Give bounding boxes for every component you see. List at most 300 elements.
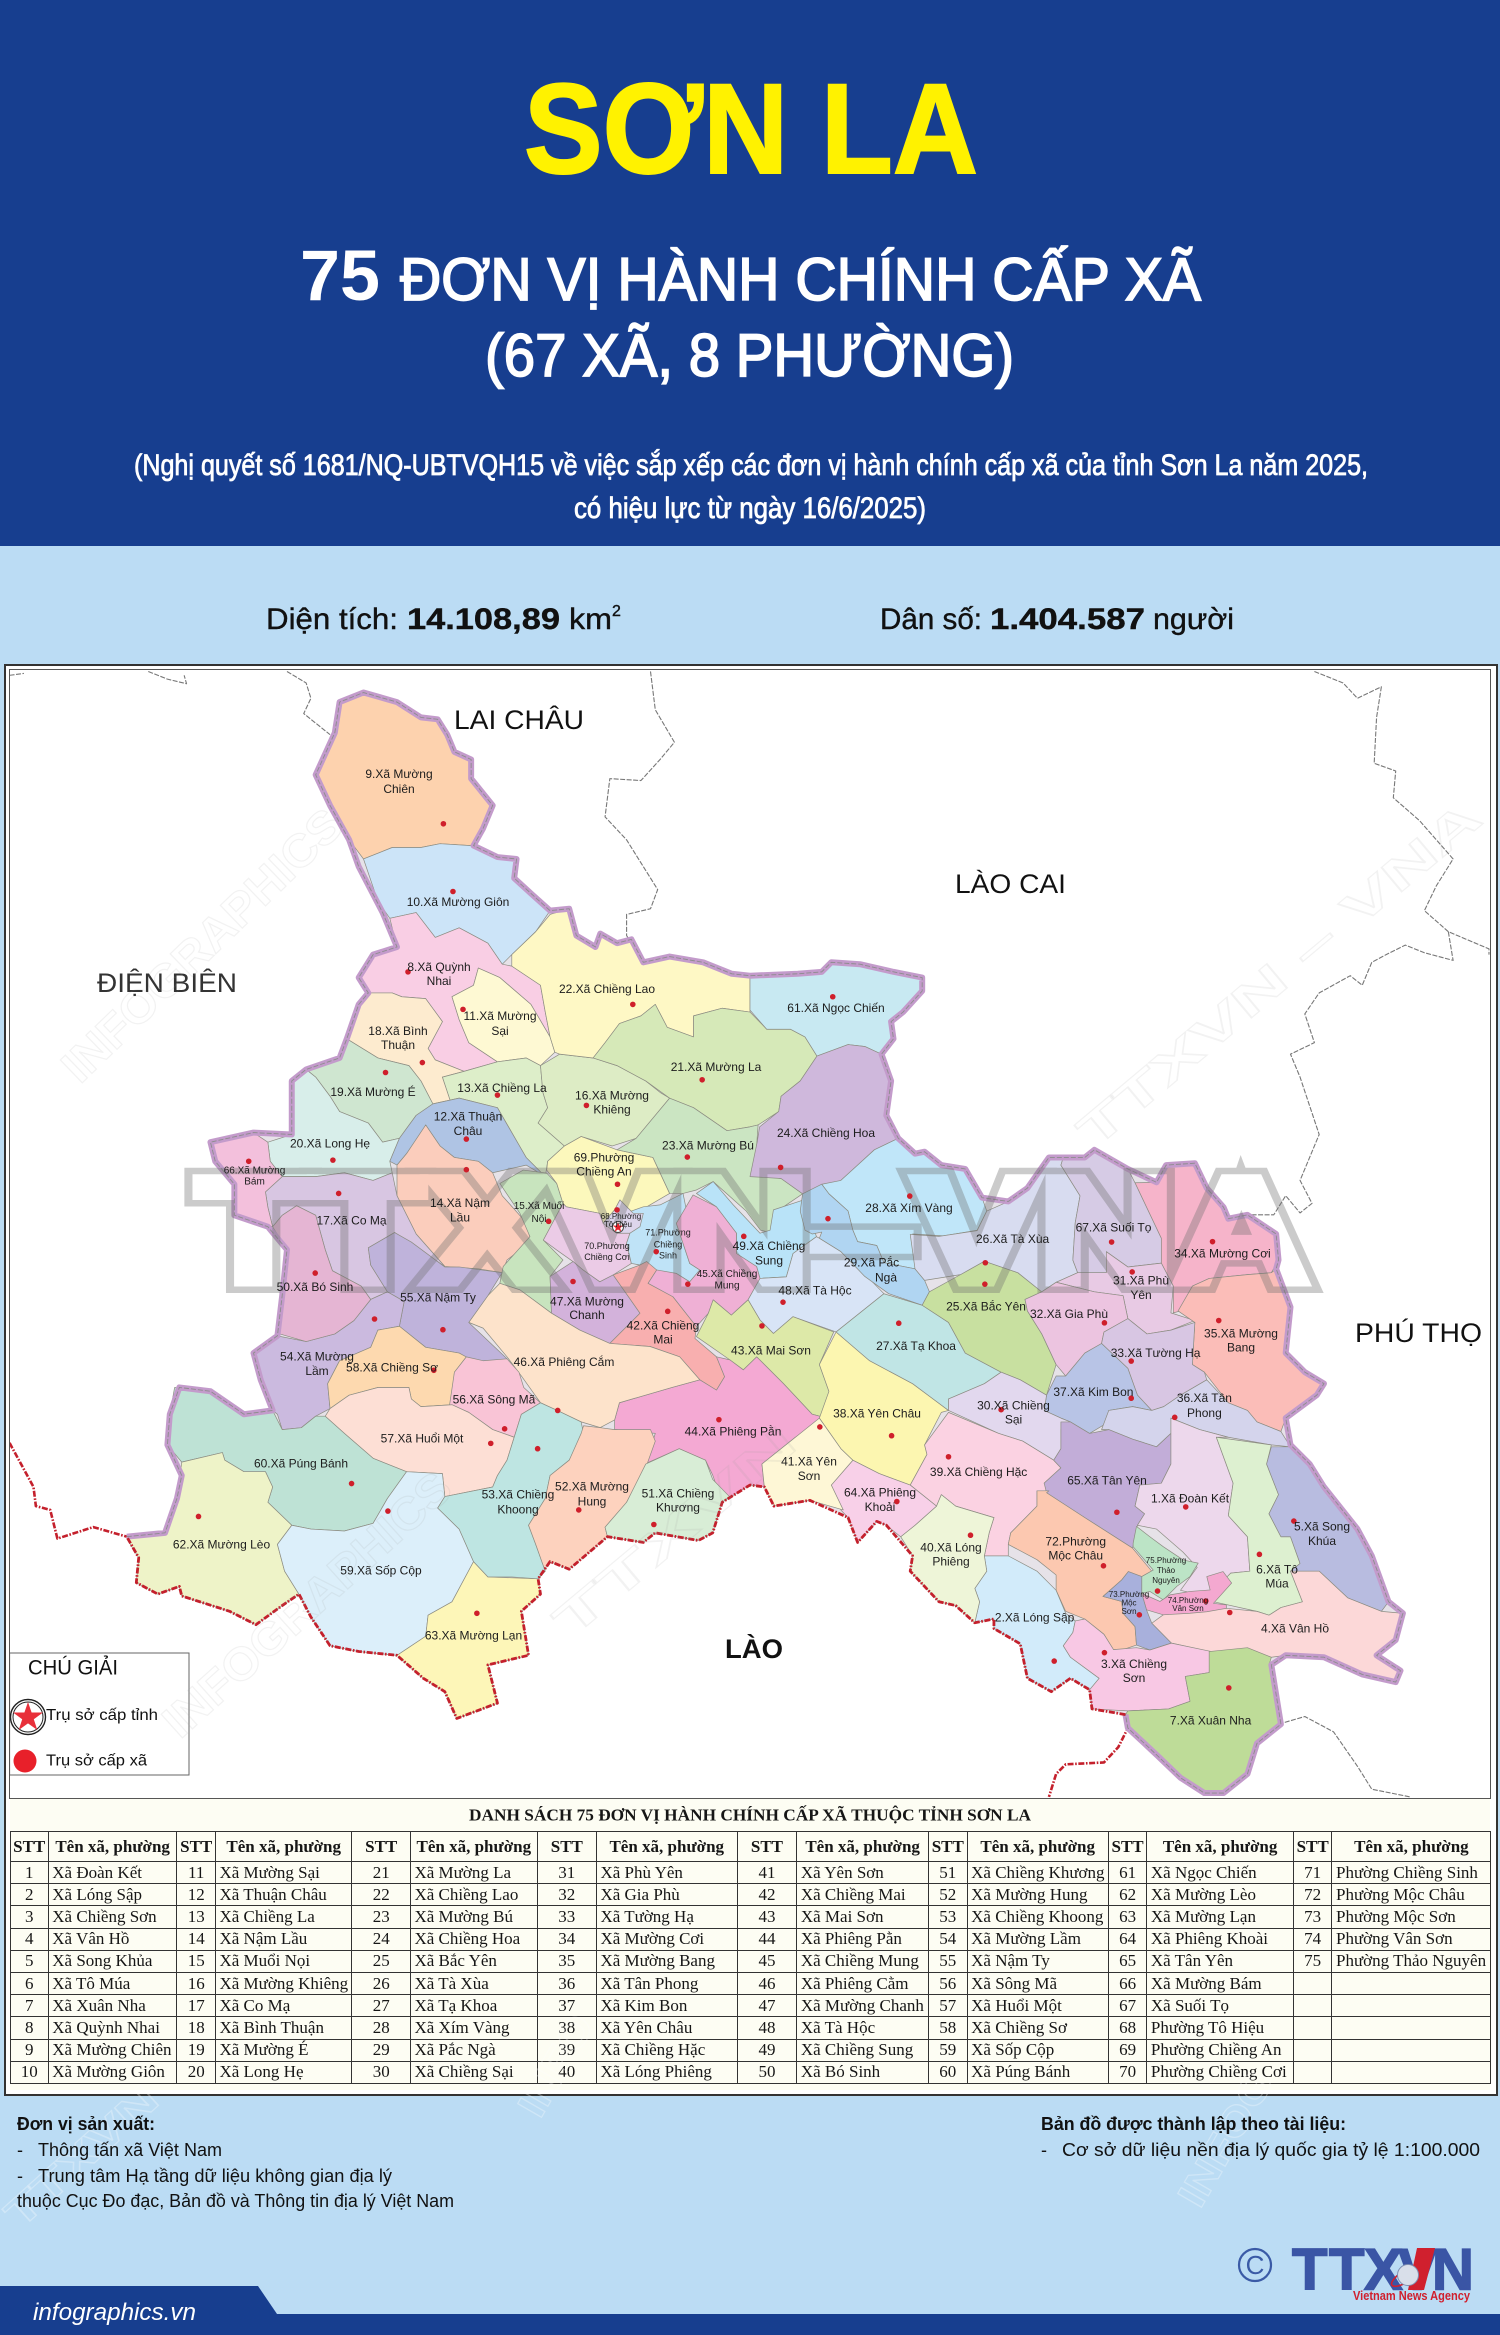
big TTXVN watermark outline (150, 1130, 1360, 1320)
faint diagonal watermarks on map: INFOGRAPHICS (152, 1461, 462, 1747)
logo: TTXVN: Vietnam News Agency (1353, 2288, 1471, 2303)
table: list of 75 communes and wards: Xã Tường Hạ (600, 1907, 694, 1926)
region 63 (397, 1562, 540, 1719)
table: list of 75 communes and wards: Xã Mường Chiên (52, 2040, 172, 2059)
region 18 (347, 993, 464, 1106)
table: list of 75 communes and wards: 58 (939, 2018, 956, 2037)
stat: area: km (569, 603, 612, 636)
table: list of 75 communes and wards: 62 (1119, 1885, 1136, 1904)
commune name labels: 41.Xã Yên (781, 1454, 837, 1468)
table: list of 75 communes and wards: Xã Quỳnh Nhai (52, 2018, 160, 2037)
region 41 (762, 1418, 853, 1510)
title: SƠN LA: SƠN LA (524, 58, 978, 201)
resolution note: có hiệu lực từ ngày 16/6/2025) (574, 492, 926, 525)
table: list of 75 communes and wards: Xã Xuân Nha (52, 1996, 146, 2015)
icon: province headquarters star (10, 1700, 46, 1734)
panel: map and table frame (4, 664, 1498, 2096)
table: list of 75 communes and wards: 75 (1304, 1951, 1321, 1970)
region 50 (273, 1206, 371, 1342)
region 25 (922, 1261, 1056, 1395)
commune name labels: 54.Xã Mường (280, 1350, 354, 1364)
table: list of 75 communes and wards: Xã Suối Tọ (1151, 1996, 1229, 2015)
producer credits: Thông tấn xã Việt Nam (38, 2140, 222, 2160)
commune name labels: 44.Xã Phiêng Pằn (685, 1424, 781, 1438)
region 64 (831, 1460, 937, 1542)
neighbouring province labels: LAI CHÂU (454, 704, 584, 735)
commune name labels: Khoong (497, 1502, 539, 1516)
table: list of 75 communes and wards: Xã Bó Sinh (801, 2062, 880, 2081)
commune name labels: 29.Xã Pắc (844, 1254, 899, 1270)
table: list of 75 communes and wards: Xã Long Hẹ (219, 2062, 304, 2081)
table: list of 75 communes and wards: Phường Thảo Nguyên (1336, 1951, 1486, 1970)
table: list of 75 communes and wards: 28 (373, 2018, 390, 2037)
table: list of 75 communes and wards: 13 (188, 1907, 205, 1926)
table: list of 75 communes and wards: Xã Mường É (219, 2040, 308, 2059)
table: list of 75 communes and wards: Xã Púng Bánh (971, 2062, 1070, 2081)
commune name labels: Tô Hiệu (604, 1220, 632, 1229)
table: list of 75 communes and wards (10, 1831, 1491, 2084)
table: list of 75 communes and wards: 22 (373, 1885, 390, 1904)
commune name labels: Mộc Châu (1048, 1548, 1103, 1562)
table: list of 75 communes and wards: 25 (373, 1951, 390, 1970)
region 12 (390, 1098, 545, 1177)
table: list of 75 communes and wards: 72 (1304, 1885, 1321, 1904)
table: list of 75 communes and wards: 31 (558, 1863, 575, 1882)
table: list of 75 communes and wards: Xã Chiềng Mung (801, 1951, 919, 1970)
region 4 (1152, 1571, 1403, 1682)
table: list of 75 communes and wards: 41 (758, 1863, 775, 1882)
region 42 (610, 1262, 725, 1390)
commune regions, south-east (762, 1150, 1403, 1793)
table: list of 75 communes and wards: 60 (939, 2062, 956, 2081)
table: list of 75 communes and wards: 30 (373, 2062, 390, 2081)
commune name labels: Phong (1187, 1406, 1222, 1420)
commune name labels: 24.Xã Chiềng Hoa (777, 1126, 875, 1140)
commune name labels: 69.Phường (574, 1150, 634, 1164)
table: list of 75 communes and wards: 64 (1119, 1929, 1136, 1948)
header band (0, 0, 1500, 546)
commune name labels: Vân Sơn (1172, 1604, 1204, 1613)
table: list of 75 communes and wards: 9 (25, 2040, 33, 2059)
region 11 (452, 968, 555, 1066)
table: list of 75 communes and wards: Tên xã, phường (417, 1836, 531, 1856)
table: list of 75 communes and wards: Xã Chiềng Khương (971, 1863, 1105, 1882)
commune name labels: Sơn (798, 1469, 820, 1483)
table: list of 75 communes and wards: Xã Vân Hồ (52, 1929, 129, 1948)
table: list of 75 communes and wards: STT (932, 1836, 964, 1856)
commune name labels: Khúa (1308, 1534, 1336, 1548)
commune name labels: 22.Xã Chiềng Lao (559, 982, 655, 996)
commune name labels: Ngà (875, 1270, 897, 1284)
table: list of 75 communes and wards: Xã Mường Bang (600, 1951, 715, 1970)
faint diagonal watermarks on map: INFOGRAPHICS (51, 798, 353, 1092)
commune name labels: Bám (244, 1176, 265, 1188)
region 51 (605, 1449, 729, 1542)
provincial headquarters star on map (612, 1222, 624, 1232)
region 8 (359, 913, 550, 1071)
legend: Trụ sở cấp tỉnh (46, 1707, 158, 1724)
commune name labels: 20.Xã Long Hẹ (290, 1136, 370, 1150)
table: list of 75 communes and wards: 52 (939, 1885, 956, 1904)
table: list of 75 communes and wards: 23 (373, 1907, 390, 1926)
region 1 (1135, 1418, 1250, 1594)
commune name labels: 48.Xã Tà Hộc (778, 1284, 852, 1298)
region 58 (328, 1326, 466, 1409)
table: list of 75 communes and wards: Xã Yên Châu (600, 2018, 692, 2037)
commune name labels: Chiềng Cơi (584, 1252, 630, 1262)
table: list of 75 communes and wards: Xã Sông Mã (971, 1974, 1057, 1993)
commune name labels: Bang (1227, 1340, 1255, 1354)
table: list of 75 communes and wards: Xã Phiêng Pằn (801, 1929, 902, 1948)
region 34 (1135, 1163, 1279, 1313)
commune name labels: 70.Phường (584, 1241, 630, 1251)
footer tab with site name: infographics.vn (33, 2299, 196, 2326)
commune name labels: 10.Xã Mường Giôn (407, 895, 509, 909)
table: list of 75 communes and wards: 37 (558, 1996, 575, 2015)
neighbouring province labels: PHÚ THỌ (1355, 1317, 1482, 1348)
stat: area (266, 603, 621, 636)
table: list of 75 communes and wards: Xã Co Mạ (219, 1996, 290, 2015)
region 17 (265, 1173, 445, 1299)
commune name labels: 45.Xã Chiềng (697, 1268, 757, 1280)
commune name labels: 9.Xã Mường (365, 767, 433, 781)
region 38 (819, 1332, 948, 1485)
commune name labels: 65.Xã Tân Yên (1067, 1474, 1147, 1488)
region 70 (543, 1203, 631, 1282)
table: list of 75 communes and wards: 18 (188, 2018, 205, 2037)
region 35 (1178, 1269, 1324, 1432)
region 55 (368, 1233, 507, 1365)
table: list of 75 communes and wards: Xã Nậm Ty (971, 1951, 1050, 1970)
table: list of 75 communes and wards: 26 (373, 1974, 390, 1993)
commune name labels: 15.Xã Muối (514, 1200, 564, 1212)
commune name labels: 72.Phường (1045, 1534, 1106, 1548)
region 7 (1125, 1648, 1281, 1793)
commune name labels: Khương (656, 1500, 700, 1514)
commune name labels: 25.Xã Bắc Yên (946, 1298, 1026, 1314)
commune name labels: 62.Xã Mường Lèo (173, 1538, 270, 1552)
table: list of 75 communes and wards: Xã Mường Giôn (52, 2062, 165, 2081)
legend (10, 1653, 189, 1775)
commune name labels (173, 767, 1350, 1728)
table: list of 75 communes and wards: Xã Mường Chanh (801, 1996, 924, 2015)
legend: CHÚ GIẢI (28, 1656, 118, 1680)
table: list of 75 communes and wards: 57 (939, 1996, 956, 2015)
table: list of 75 communes and wards: Xã Chiềng Mai (801, 1885, 906, 1904)
table: list of 75 communes and wards: Xã Lóng Sập (52, 1885, 142, 1904)
table: list of 75 communes and wards: 74 (1304, 1929, 1321, 1948)
table: list of 75 communes and wards: 59 (939, 2040, 956, 2059)
table: list of 75 communes and wards: Phường Tô Hiệu (1151, 2018, 1264, 2037)
commune name labels: 18.Xã Bình (368, 1024, 428, 1038)
table: list of 75 communes and wards: 8 (25, 2018, 33, 2037)
commune name labels: Nội (531, 1214, 547, 1225)
commune name labels: 33.Xã Tường Hạ (1111, 1346, 1201, 1360)
faint footer watermarks: TTXVN (0, 2077, 167, 2237)
region 26 (910, 1158, 1080, 1292)
region 27 (836, 1294, 1001, 1410)
table: list of 75 communes and wards: 65 (1119, 1951, 1136, 1970)
table: list of 75 communes and wards: Xã Xím Vàng (414, 2018, 510, 2037)
stat: population: người (1153, 603, 1234, 636)
region 10 (364, 844, 550, 964)
table: list of 75 communes and wards: 70 (1119, 2062, 1136, 2081)
table: list of 75 communes and wards: Xã Pắc Ngà (414, 2040, 496, 2059)
table: list of 75 communes and wards: Xã Chiềng Lao (414, 1885, 518, 1904)
neighbouring province labels: LÀO (725, 1633, 783, 1664)
commune name labels: 75.Phường (1146, 1556, 1186, 1565)
region 6 (1214, 1437, 1302, 1615)
table: list of 75 communes and wards: Xã Tà Hộc (801, 2018, 875, 2037)
province border, purple (127, 693, 1403, 1793)
commune name labels: 5.Xã Song (1294, 1520, 1350, 1534)
commune name labels: 40.Xã Lóng (920, 1540, 982, 1554)
region 5 (1267, 1447, 1389, 1611)
table: list of 75 communes and wards: Xã Mường La (414, 1863, 511, 1882)
region 24 (750, 1045, 898, 1194)
stat: area: Diện tích: (266, 603, 398, 636)
region 67 (1061, 1150, 1161, 1273)
table: list of 75 communes and wards: 46 (758, 1974, 775, 1993)
faint footer watermarks: INFO (510, 2007, 603, 2124)
table: list of 75 communes and wards: Tên xã, phường (805, 1836, 920, 1856)
icon: copyright: C (1246, 2250, 1264, 2280)
region 46 (469, 1283, 700, 1428)
commune name labels: Phiêng (932, 1554, 970, 1568)
region 69 (547, 1136, 670, 1223)
region 62 (127, 1453, 299, 1625)
table: list of 75 communes and wards: Phường Chiềng An (1151, 2040, 1282, 2059)
commune name labels: Chiềng An (576, 1164, 632, 1178)
commune name labels: 36.Xã Tân (1177, 1391, 1232, 1405)
region 74 (1142, 1572, 1232, 1615)
commune name labels: 4.Xã Vân Hồ (1261, 1622, 1329, 1636)
table: list of 75 communes and wards: Xã Muổi Nọi (219, 1951, 310, 1970)
table: list of 75 communes and wards: 63 (1119, 1907, 1136, 1926)
commune name labels: Sinh (659, 1250, 677, 1260)
commune name labels: 13.Xã Chiềng La (457, 1081, 547, 1095)
table: list of 75 communes and wards: Phường Chiềng Cơi (1151, 2062, 1287, 2081)
table: list of 75 communes and wards: 55 (939, 1951, 956, 1970)
commune name labels: Lầm (305, 1364, 329, 1378)
faint footer watermarks: INFOG (1170, 2063, 1283, 2214)
table: list of 75 communes and wards: Xã Mai Sơn (801, 1907, 884, 1926)
commune name labels: Thảo (1157, 1566, 1176, 1575)
commune name labels: Châu (454, 1124, 482, 1138)
map source credits: Bản đồ được thành lập theo tài liệu: (1041, 2114, 1346, 2134)
commune name labels: Chiên (383, 782, 415, 796)
heading: 67 xã, 8 phường: (67 XÃ, 8 PHƯỜNG) (485, 322, 1014, 389)
table: list of 75 communes and wards: Xã Đoàn Kết (52, 1863, 142, 1882)
table: list of 75 communes and wards: Xã Mường Hung (971, 1885, 1088, 1904)
commune name labels: 3.Xã Chiềng (1101, 1657, 1167, 1671)
stat: population: Dân số: (880, 603, 982, 636)
table: list of 75 communes and wards: 1 (25, 1863, 33, 1882)
region 3 (1063, 1619, 1212, 1711)
region 52 (529, 1426, 655, 1579)
table: list of 75 communes and wards: Phường Vân Sơn (1336, 1929, 1453, 1948)
region 47 (550, 1262, 640, 1343)
table: list of 75 communes and wards: Xã Chiềng Sơn (52, 1907, 157, 1926)
stat: area: 2 (612, 603, 621, 620)
commune name labels: 52.Xã Mường (555, 1480, 629, 1494)
table: list of 75 communes and wards: 11 (188, 1863, 204, 1882)
resolution note (134, 449, 1368, 525)
table: list of 75 communes and wards: Xã Lóng Phiêng (600, 2062, 712, 2081)
commune name labels: Sơn (1123, 1671, 1145, 1685)
table: list of 75 communes and wards: Tên xã, phường (1354, 1836, 1469, 1856)
commune name labels: 17.Xã Co Mạ (316, 1214, 387, 1228)
table: list of 75 communes and wards: Tên xã, phường (226, 1836, 341, 1856)
region 57 (325, 1388, 514, 1497)
table: list of 75 communes and wards: 27 (373, 1996, 390, 2015)
table: list of 75 communes and wards: 7 (25, 1996, 33, 2015)
commune name labels: Sung (755, 1254, 783, 1268)
neighbouring province labels (97, 704, 1482, 1664)
table: list of 75 communes and wards: STT (13, 1836, 45, 1856)
commune name labels: Sại (1005, 1412, 1022, 1426)
table: list of 75 communes and wards: Xã Chiềng Sơ (971, 2018, 1067, 2037)
table: list of 75 communes and wards: 16 (188, 1974, 205, 1993)
map source credits: - (1041, 2140, 1047, 2160)
commune name labels: 56.Xã Sông Mã (453, 1392, 536, 1406)
commune name labels: 63.Xã Mường Lạn (425, 1628, 522, 1642)
table: list of 75 communes and wards: Xã Chiềng Sung (801, 2040, 913, 2059)
region 49 (696, 1182, 816, 1278)
commune name labels: 55.Xã Nậm Ty (400, 1290, 476, 1304)
commune name labels: Nguyên (1152, 1576, 1180, 1585)
commune name labels: 43.Xã Mai Sơn (731, 1344, 811, 1358)
commune name labels: 1.Xã Đoàn Kết (1151, 1492, 1230, 1506)
table: list of 75 communes and wards: STT (1297, 1836, 1329, 1856)
region 14 (397, 1125, 531, 1273)
commune name labels: 26.Xã Tà Xùa (976, 1232, 1050, 1246)
region 9 (316, 693, 493, 859)
commune name labels: Chanh (569, 1308, 605, 1322)
commune name labels: 35.Xã Mường (1204, 1326, 1278, 1340)
table: list of 75 communes and wards: 33 (558, 1907, 575, 1926)
commune name labels: Múa (1265, 1576, 1289, 1590)
table: list of 75 communes and wards: 15 (188, 1951, 205, 1970)
commune name labels: 39.Xã Chiềng Hặc (930, 1465, 1027, 1479)
table: list of 75 communes and wards: Xã Chiềng Hặc (600, 2040, 705, 2059)
table: list of 75 communes and wards: Xã Tà Xùa (414, 1974, 489, 1993)
table: list of 75 communes and wards: Xã Tô Múa (52, 1974, 130, 1993)
region 44 (615, 1357, 827, 1502)
producer credits (17, 2114, 454, 2211)
table: list of 75 communes and wards: 48 (758, 2018, 775, 2037)
table: list of 75 communes and wards: 67 (1119, 1996, 1136, 2015)
footer band (0, 2314, 1500, 2335)
province base fill (176, 849, 1397, 1714)
table: list of 75 communes and wards: 56 (939, 1974, 956, 1993)
commune name labels: 12.Xã Thuận (434, 1110, 502, 1124)
region 13 (433, 1058, 564, 1177)
table: list of 75 communes and wards: 44 (758, 1929, 775, 1948)
commune name labels: 42.Xã Chiềng (627, 1318, 699, 1332)
table: list of 75 communes and wards: 21 (373, 1863, 390, 1882)
commune name labels: 21.Xã Mường La (671, 1060, 762, 1074)
region 36 (1102, 1380, 1290, 1447)
region 59 (277, 1472, 474, 1655)
table: list of 75 communes and wards: 12 (188, 1885, 205, 1904)
commune name labels: 51.Xã Chiềng (642, 1486, 714, 1500)
commune name labels: 74.Phường (1168, 1596, 1208, 1605)
table: list of 75 communes and wards: 45 (758, 1951, 775, 1970)
table: list of 75 communes and wards: 42 (758, 1885, 775, 1904)
commune name labels: Mung (714, 1280, 740, 1292)
commune name labels: 38.Xã Yên Châu (833, 1406, 921, 1420)
table: list of 75 communes and wards: Xã Mường Cơi (600, 1929, 704, 1948)
table: list of 75 communes and wards: Tên xã, phường (980, 1836, 1095, 1856)
table: list of 75 communes and wards: Xã Bắc Yên (414, 1951, 497, 1970)
heading: 75 đơn vị hành chính cấp xã: 75 (300, 237, 380, 316)
neighbouring province labels: LÀO CAI (955, 869, 1066, 899)
icon: copyright (1239, 2249, 1271, 2281)
table: list of 75 communes and wards: Xã Nậm Lầu (219, 1929, 307, 1948)
region 61 (750, 962, 922, 1056)
table: list of 75 communes and wards: 10 (21, 2062, 38, 2081)
region 15 (500, 1170, 563, 1313)
commune name labels: 11.Xã Mường (463, 1009, 537, 1023)
map source credits: Cơ sở dữ liệu nền địa lý quốc gia tỷ lệ 1:100.000 (1062, 2140, 1480, 2160)
producer credits: - (17, 2140, 23, 2160)
table: list of 75 communes and wards: 71 (1304, 1863, 1321, 1882)
commune name labels: Khoải (865, 1500, 895, 1514)
table: list of 75 communes and wards: STT (1111, 1836, 1144, 1856)
commune name labels: 60.Xã Púng Bánh (254, 1456, 348, 1470)
table: list of 75 communes and wards: 17 (188, 1996, 205, 2015)
stat: population (880, 603, 1234, 636)
stat: population: 1.404.587 (990, 603, 1145, 636)
commune name labels: 7.Xã Xuân Nha (1170, 1714, 1252, 1728)
commune name labels: Hung (578, 1494, 606, 1508)
commune name labels: 47.Xã Mường (550, 1294, 624, 1308)
commune name labels: 58.Xã Chiềng Sơ (346, 1360, 438, 1374)
commune name labels: Mộc (1121, 1599, 1137, 1608)
table: list of 75 communes and wards: Xã Ngọc Chiến (1151, 1863, 1257, 1882)
producer credits: Trung tâm Hạ tầng dữ liệu không gian địa lý (38, 2166, 392, 2186)
table: list of 75 communes and wards: 61 (1119, 1863, 1136, 1882)
region 71 (622, 1193, 700, 1282)
table: list of 75 communes and wards: Xã Mường Lèo (1151, 1885, 1256, 1904)
table: list of 75 communes and wards: 43 (758, 1907, 775, 1926)
commune headquarters dots (198, 824, 1294, 1688)
region 31 (1056, 1252, 1195, 1334)
commune name labels: 8.Xã Quỳnh (407, 960, 471, 974)
table: list of 75 communes and wards: 68 (1119, 2018, 1136, 2037)
header texts (134, 58, 1368, 636)
commune name labels: 50.Xã Bó Sinh (277, 1280, 353, 1294)
commune name labels: 73.Phường (1109, 1590, 1149, 1599)
region 28 (822, 1138, 987, 1269)
table: list of 75 communes and wards: Xã Mường Bám (1151, 1974, 1262, 1993)
region 40 (901, 1495, 994, 1623)
region 65 (1044, 1422, 1171, 1548)
commune regions, south-west (127, 1206, 729, 1719)
table: list of 75 communes and wards: 40 (558, 2062, 575, 2081)
table title: DANH SÁCH 75 ĐƠN VỊ HÀNH CHÍNH CẤP XÃ THUỘC TỈNH SƠN LA (469, 1806, 1031, 1824)
table: list of 75 communes and wards: Xã Mường Khiêng (219, 1974, 348, 1993)
faint diagonal watermarks on map: TTXVN (543, 1415, 806, 1648)
table: list of 75 communes and wards: Xã Mường Lạn (1151, 1907, 1256, 1926)
commune name labels: Thuận (381, 1038, 415, 1052)
region 66 (210, 1133, 282, 1227)
table: list of 75 communes and wards: 24 (373, 1929, 390, 1948)
commune name labels: 71.Phường (645, 1228, 691, 1238)
table: list of 75 communes and wards: 6 (25, 1974, 33, 1993)
commune name labels: 46.Xã Phiêng Cắm (514, 1354, 614, 1369)
